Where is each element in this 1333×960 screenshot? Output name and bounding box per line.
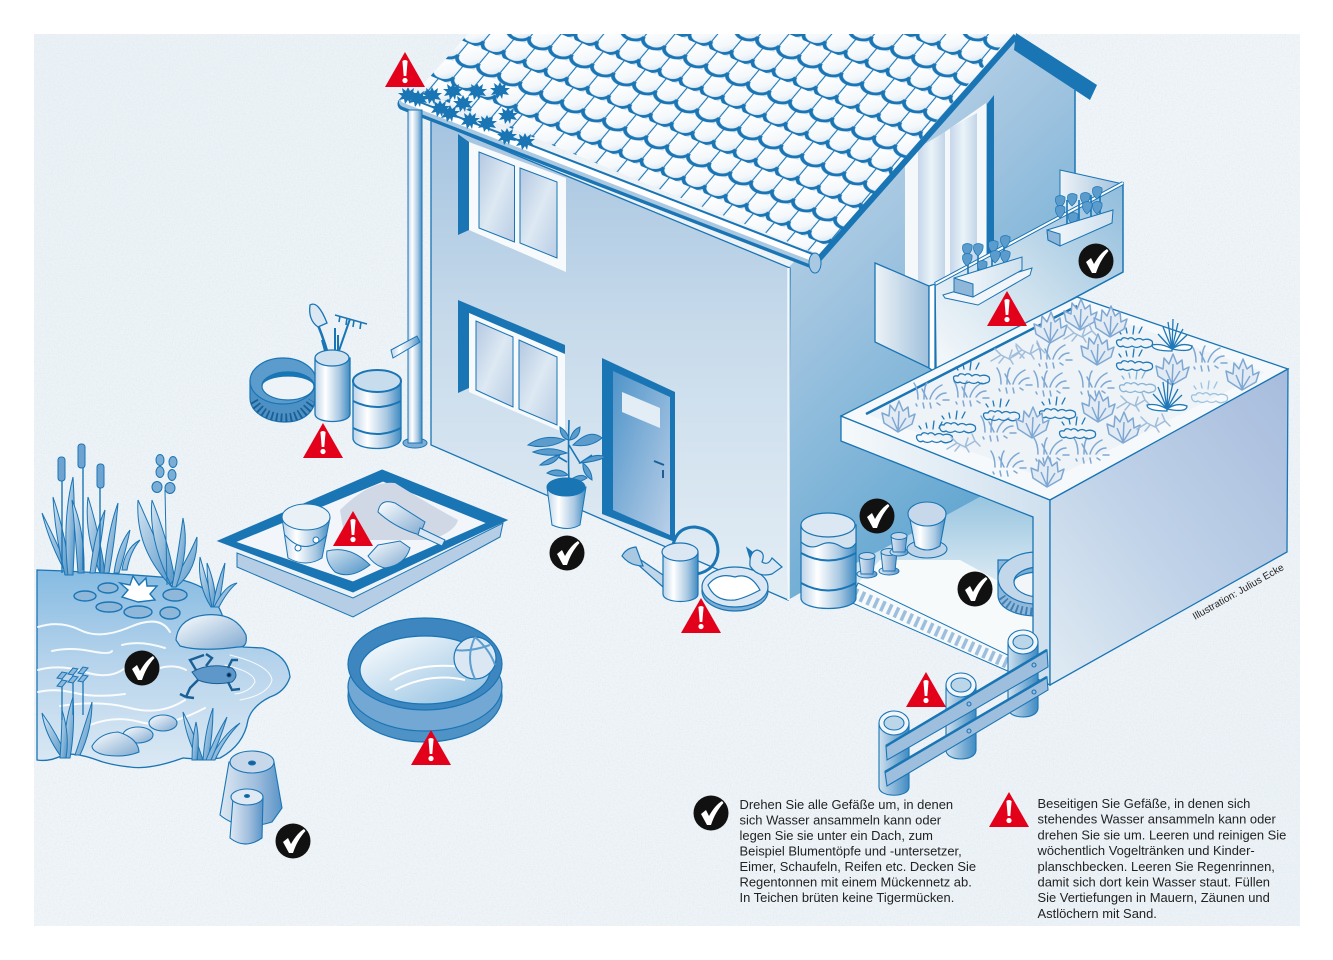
small pots [857,532,908,578]
bird bath with bird [702,548,782,611]
garage side wall [1050,369,1288,685]
paddling pool [348,618,502,742]
house front wall [431,120,790,600]
iris [138,454,197,587]
water ripples [38,622,272,725]
pond [37,570,290,768]
gable roof edge [1014,33,1097,100]
grass front right of pond [183,708,240,760]
flower box upper right [1047,186,1113,246]
tool pot with spade and rake [310,304,367,422]
legend: warning [989,792,1290,921]
gable window [905,95,994,290]
legend: warning: damit sich dort kein Wasser staut. Füllen [1038,874,1270,890]
frog [180,654,240,698]
door [602,358,675,542]
house side wall with gable [788,40,1075,600]
sand moulds [327,541,410,575]
downpipe [391,110,427,448]
lily pads and water lily [74,576,187,619]
beach ball [454,637,496,679]
upper window [458,134,566,272]
legend: warning: Beseitigen Sie Gefäße, in denen sich [1038,796,1250,811]
wooden fence [879,630,1048,795]
scoop [378,502,445,546]
green roof plants [882,299,1259,487]
legend: check: In Teichen brüten keine Tigermücken. [740,890,954,905]
balcony rail [935,183,1123,284]
legend: warning: wöchentlich Vogeltränken und Kinder- [1036,843,1255,858]
legend: check: Regentonnen mit einem Mückennetz ab. [740,874,972,890]
upside-down flower pots [220,751,282,844]
bucket [282,504,330,563]
garage floor with drain [850,560,1033,672]
legend: warning: drehen Sie sie um. Leeren und reinigen Sie [1038,827,1286,842]
rain gutter [404,96,821,273]
flower box on balcony [943,236,1032,305]
reeds and cattails at back of pond [42,444,140,575]
legend: warning: stehendes Wasser ansammeln kann oder [1038,812,1276,827]
grass on pond edge [199,557,237,607]
bird [747,548,782,575]
legend: check: legen Sie sie unter ein Dach, zum [740,828,933,843]
balcony front wall [935,183,1123,372]
covered rain barrel with mosquito net [801,513,856,608]
barrel by the pipe [353,370,401,448]
garage roof slab [841,297,1288,685]
tyre [250,358,316,422]
legend: check: Beispiel Blumentöpfe und -untersetzer, [740,844,962,858]
lower window [458,300,565,433]
balcony side panel [875,263,935,372]
potted plant by door [528,420,606,528]
check badges [124,244,1114,858]
warning badges [303,52,1027,765]
leaves clogging the gutter [398,82,535,150]
reeds front left of pond [42,667,92,758]
illustration credit: Illustration: Julius Ecke [1191,562,1287,623]
rock [176,615,246,649]
roof with scalloped tiles [418,34,1016,260]
legend: check: Drehen Sie alle Gefäße um, in denen [740,797,953,812]
carport interior wall [802,497,1033,668]
tyre in carport [997,552,1032,616]
legend: warning: Sie Vertiefungen in Mauern, Zäunen und [1038,890,1270,905]
legend: check: Eimer, Schaufeln, Reifen etc. Decken Sie [740,859,976,874]
sand heap [340,483,458,540]
legend: warning: planschbecken. Leeren Sie Regenrinnen, [1038,859,1275,874]
pond stones [92,715,177,756]
legend: check: sich Wasser ansammeln kann oder [740,812,942,828]
large flower pot with saucer [907,502,947,558]
legend: check [694,796,980,905]
legend: warning: Astlöchern mit Sand. [1038,906,1157,921]
watering can [622,527,718,602]
rear balcony panel [1060,170,1123,220]
sandbox [218,470,507,617]
